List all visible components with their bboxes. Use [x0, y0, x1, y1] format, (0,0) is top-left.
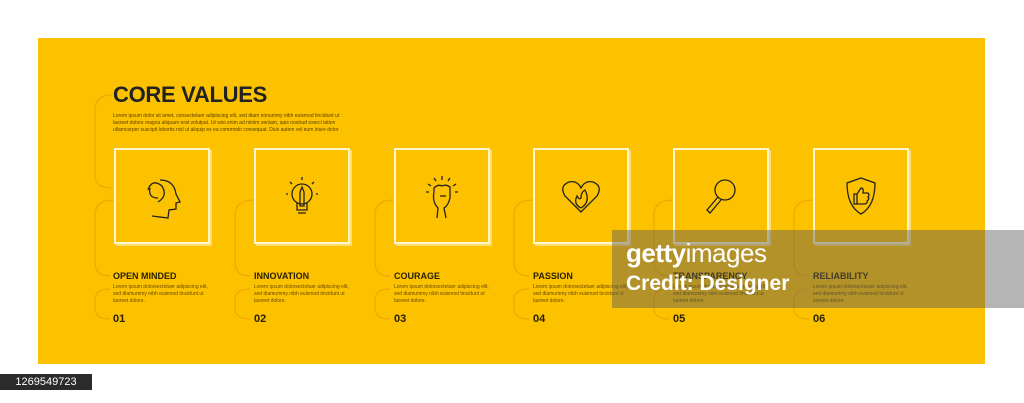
item 4 text: PASSION	[533, 271, 573, 281]
panel: yellow background	[38, 38, 985, 364]
intro text: Lorem ipsum dolor sit amet, consectetuer adipiscing elit, sed diam nonummy nibh euismod tincidunt ut laoreet dolore magna aliquam erat volutpat. Ut wisi enim ad minim veniam, quis nostrud exerci tation ullamcorper suscipit lobortis nisl ut aliquip ex ea commodo consequat. Duis autem vel eum iriure dolor	[113, 113, 339, 133]
watermark band: Credit: Designer	[626, 272, 789, 295]
item 1 text: OPEN MINDED	[113, 271, 177, 281]
text: 01	[113, 313, 125, 325]
image id label	[0, 374, 92, 390]
text: Lorem ipsum dolorsectetuer adipiscing elit, sed diamummy nibh euismod tincidunt ut laoreet dolore.	[254, 284, 349, 304]
text: 06	[813, 313, 825, 325]
text: 02	[254, 313, 266, 325]
icon box: passion	[533, 148, 629, 244]
text: 05	[673, 313, 685, 325]
item 3 text: COURAGE	[394, 271, 440, 281]
icon box: innovation	[254, 148, 350, 244]
icon box: open minded	[114, 148, 210, 244]
text: 04	[533, 313, 545, 325]
watermark band: gettyimages	[626, 238, 766, 268]
text: Lorem ipsum dolorsectetuer adipiscing elit, sed diamummy nibh euismod tincidunt ut laoreet dolore.	[813, 284, 908, 304]
text: Lorem ipsum dolorsectetuer adipiscing elit, sed diamummy nibh euismod tincidunt ut laoreet dolore.	[394, 284, 489, 304]
item 6 text: RELIABILITY	[813, 271, 868, 281]
icon box: reliability	[813, 148, 909, 244]
text: Lorem ipsum dolorsectetuer adipiscing elit, sed diamummy nibh euismod tincidunt ut laoreet dolore.	[113, 284, 208, 304]
item 5 text: TRANSPARENCY	[673, 271, 747, 281]
text: Lorem ipsum dolorsectetuer adipiscing elit, sed diamummy nibh euismod tincidunt ut laoreet dolore.	[533, 284, 628, 304]
icon box: transparency	[673, 148, 769, 244]
text: Lorem ipsum dolorsectetuer adipiscing elit, sed diamummy nibh euismod tincidunt ut laoreet dolore.	[673, 284, 768, 304]
icon box: courage	[394, 148, 490, 244]
title: CORE VALUES	[113, 82, 267, 107]
watermark band	[612, 230, 1024, 308]
text: 03	[394, 313, 406, 325]
image id label: 1269549723	[15, 376, 77, 388]
item 2 text: INNOVATION	[254, 271, 309, 281]
